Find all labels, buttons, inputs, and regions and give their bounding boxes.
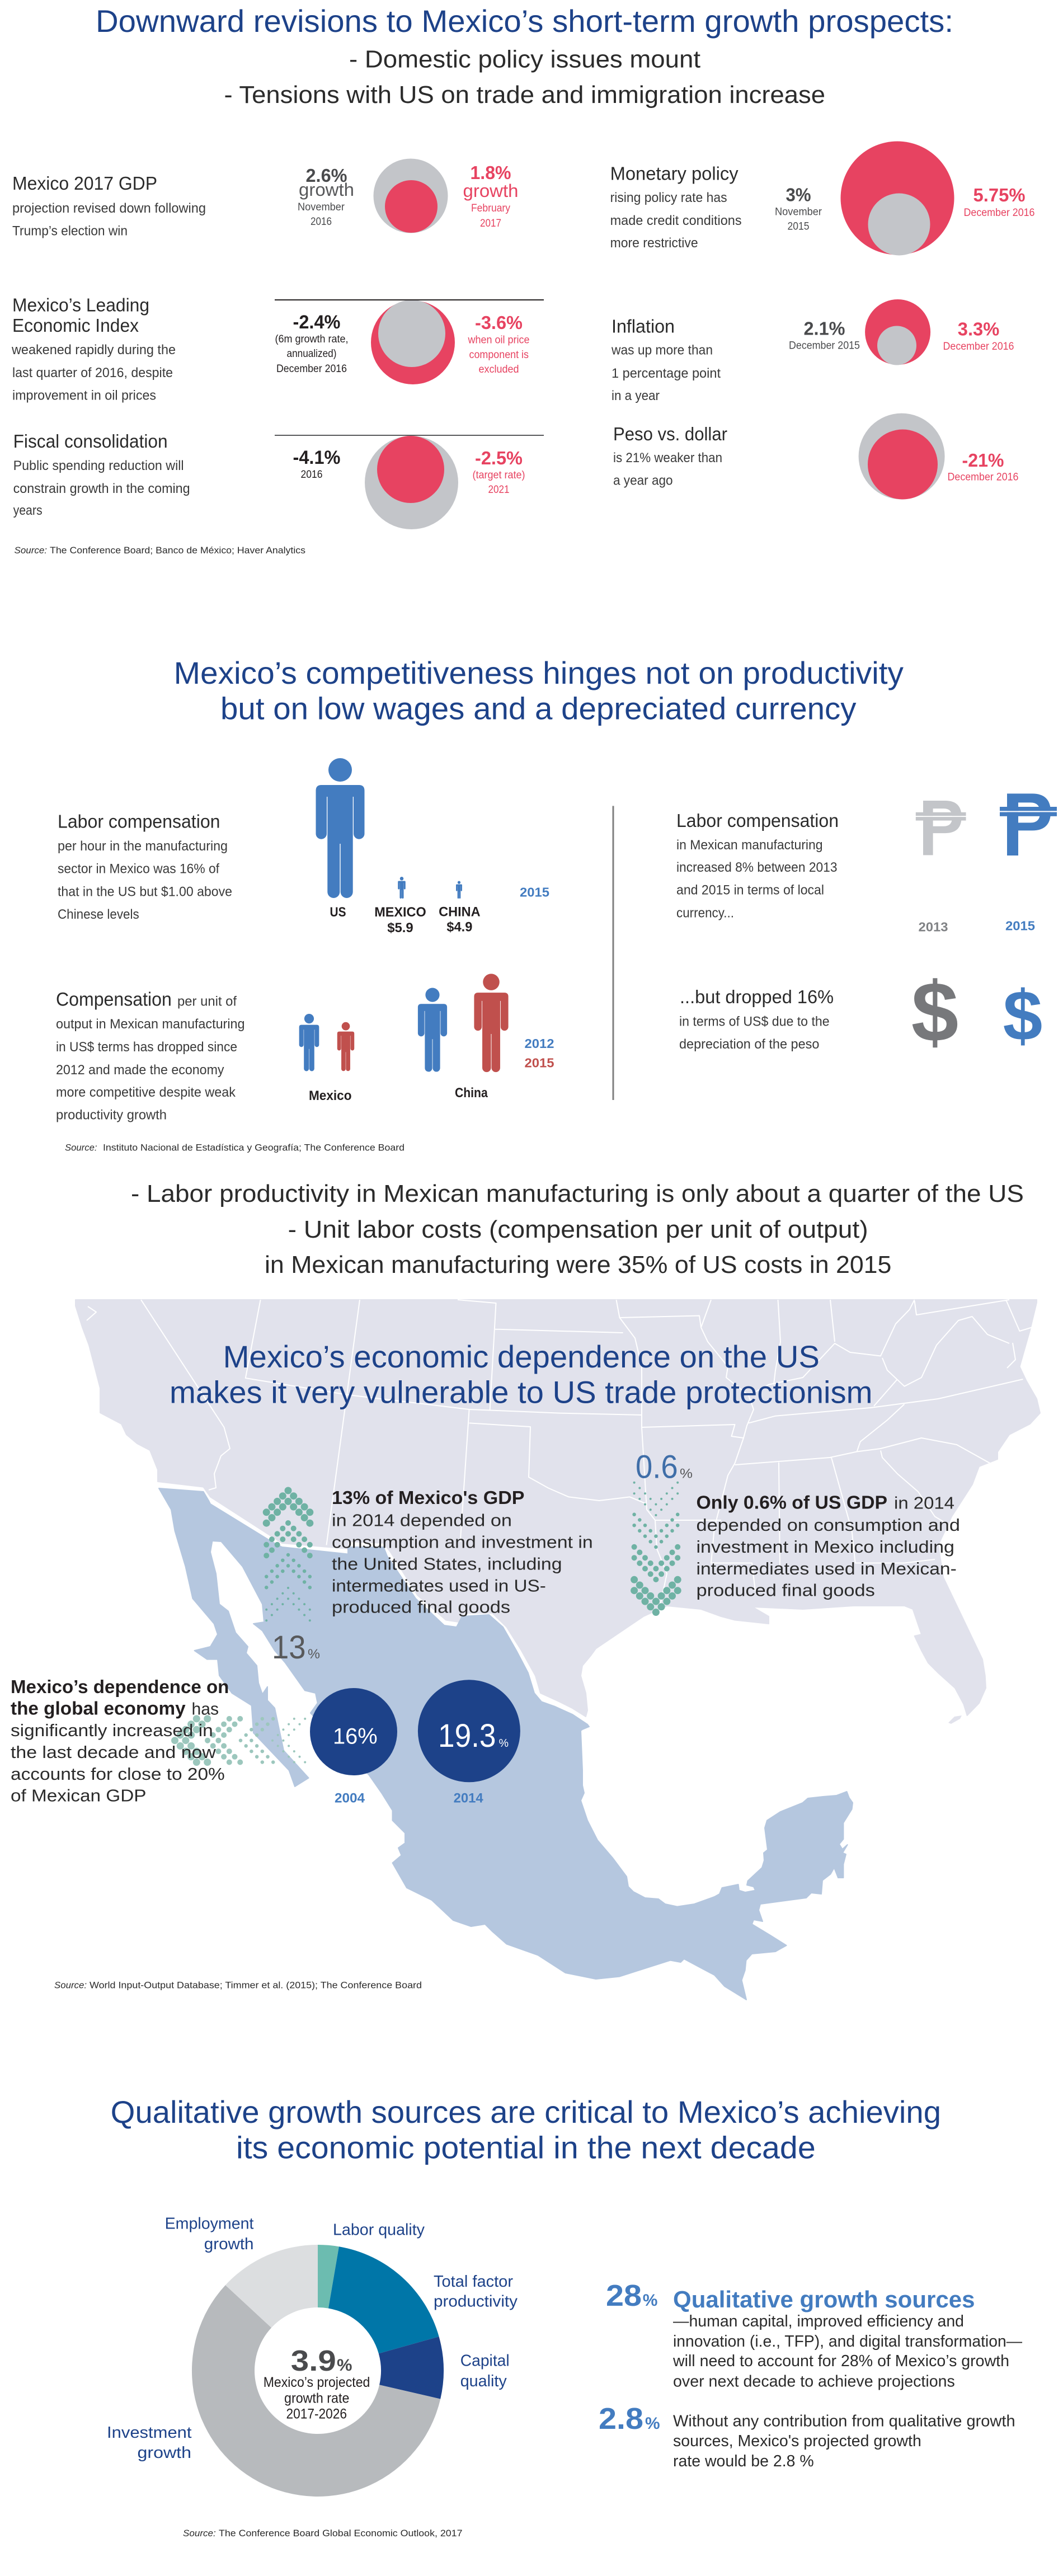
panel: trade dependence map	[11, 1300, 1040, 2000]
chart: compensation pictogram 2015: $4.9	[446, 920, 472, 935]
chart: fiscal consolidation circles: -4.1%	[293, 447, 340, 468]
chart: Leading Economic Index circles: December 2016	[276, 363, 347, 375]
text block: Leading Economic Index: improvement in oil prices	[12, 388, 156, 403]
legend label: employment growth: Employment	[165, 2215, 254, 2233]
legend label: capital quality: quality	[460, 2372, 507, 2390]
chart: GDP growth circles: 2017	[480, 218, 501, 229]
text block: Mexico 2017 GDP: Mexico 2017 GDP	[12, 173, 157, 194]
chart: unit compensation pictogram 2012 vs 2015	[299, 974, 554, 1103]
text block: Fiscal consolidation	[13, 431, 190, 518]
text block: 13% of Mexico's GDP: the United States, including	[332, 1554, 562, 1573]
chart: monetary policy circles: 5.75%	[973, 185, 1025, 205]
text block: Peso vs. dollar: is 21% weaker than	[613, 450, 722, 466]
text block: Inflation: in a year	[612, 388, 660, 403]
text block: labor productivity takeaways: - Labor productivity in Mexican manufacturing is only about a quarter of the US	[131, 1180, 1024, 1207]
text block: dependence on the global economy: has	[191, 1699, 219, 1718]
stat circle: 16% in 2004	[310, 1688, 397, 1806]
panel: competitiveness	[56, 655, 1057, 1153]
panel: short-term growth prospects	[11, 3, 1034, 556]
text block: dropped 16%	[679, 986, 834, 1052]
chart: GDP growth circles: growth	[299, 180, 354, 200]
chart: GDP growth circles	[298, 159, 518, 233]
source note: Source:	[54, 1981, 87, 1991]
text block: without qualitative contribution: sources, Mexico's projected growth	[673, 2432, 921, 2450]
text block: Inflation: Inflation	[612, 316, 675, 337]
text block: compensation per unit of output: 2012 and made the economy	[56, 1063, 224, 1078]
text block: Leading Economic Index: Mexico’s Leading	[12, 294, 149, 316]
text block: compensation per unit of output: Compensation	[56, 989, 172, 1010]
title: but on low wages and a depreciated currency	[220, 690, 856, 726]
center value	[264, 2345, 370, 2422]
legend label: employment growth	[165, 2215, 254, 2253]
source note: Instituto Nacional de Estadística y Geografía; The Conference Board	[103, 1143, 404, 1153]
text block: labor productivity takeaways	[131, 1180, 1024, 1278]
chart: compensation pictogram 2015: MEXICO	[374, 905, 426, 920]
source note: Source:	[15, 546, 47, 556]
text block: compensation per unit of output	[56, 989, 245, 1123]
segment: employment growth	[225, 2245, 318, 2328]
stat circle: 19.3% in 2014: 2014	[454, 1790, 483, 1806]
chart: GDP growth circles: growth	[463, 181, 518, 201]
text block: Leading Economic Index: last quarter of 2016, despite	[12, 365, 173, 380]
arrow: 13% flow upward	[266, 1491, 310, 1620]
text block: without qualitative contribution: Without any contribution from qualitative growth	[673, 2413, 1015, 2431]
stat: 28%: 28	[606, 2279, 642, 2312]
year labels: 2015	[1005, 919, 1035, 933]
text block: labor compensation in local currency	[676, 810, 839, 920]
text block: qualitative growth sources: will need to account for 28% of Mexico’s growth	[672, 2352, 1009, 2370]
chart: compensation pictogram 2015: $5.9	[387, 920, 413, 936]
text block: labor compensation per hour: that in the US but $1.00 above	[58, 884, 232, 900]
panel: qualitative growth sources	[107, 2094, 1022, 2539]
icon: US person	[316, 758, 365, 898]
text block: labor compensation per hour: Chinese levels	[58, 907, 139, 922]
text block: Leading Economic Index: Economic Index	[12, 315, 139, 336]
chart: fiscal consolidation circles	[275, 435, 544, 529]
text block: qualitative growth sources: —human capital, improved efficiency and	[673, 2312, 964, 2330]
chart: monetary policy circles: November	[775, 206, 822, 218]
stat: 28%: %	[643, 2291, 657, 2310]
segment: total factor productivity	[328, 2246, 439, 2353]
chart: Leading Economic Index circles: when oil price	[468, 335, 529, 346]
chart: monetary policy circles: 2015	[788, 220, 809, 233]
legend label: capital quality	[460, 2352, 510, 2390]
chart: GDP growth circles: 2016	[311, 216, 332, 228]
segment: investment growth	[192, 2285, 440, 2497]
text block: 13% of Mexico's GDP: consumption and investment in	[332, 1533, 593, 1552]
text block: 0.6% of US GDP: Only 0.6% of US GDP	[696, 1492, 887, 1513]
arrow: 0.6% flow downward	[634, 1483, 678, 1613]
chart: peso circles: December 2016	[948, 471, 1018, 483]
source note: Source:	[183, 2528, 216, 2539]
icon: dollar 2013: $	[911, 965, 958, 1060]
chart: compensation pictogram 2015: US	[330, 905, 346, 920]
chart: Leading Economic Index circles: -3.6%	[475, 312, 523, 333]
map: Mexico	[159, 1488, 853, 2000]
text block: qualitative growth sources	[672, 2286, 1022, 2391]
title: Mexico’s competitiveness hinges not on productivity	[174, 655, 904, 690]
text block: compensation per unit of output: output in Mexican manufacturing	[56, 1017, 245, 1032]
stat: 28%	[606, 2279, 657, 2312]
text block: labor compensation in local currency: and 2015 in terms of local	[676, 882, 824, 897]
icon: peso 2015	[1000, 793, 1057, 855]
text block: qualitative growth sources: Qualitative growth sources	[673, 2286, 975, 2312]
legend label: employment growth: growth	[204, 2235, 253, 2253]
text block: Monetary policy: Monetary policy	[610, 163, 739, 184]
stat: 2.8%: 2.8	[599, 2402, 643, 2436]
text block: Fiscal consolidation: constrain growth in the coming	[13, 481, 190, 496]
text block: Inflation: 1 percentage point	[612, 366, 721, 381]
stat: 0.6%: 0.6	[636, 1449, 678, 1486]
legend label: total factor productivity: productivity	[434, 2293, 518, 2311]
title: Mexico’s economic dependence on the US	[223, 1339, 820, 1374]
title	[174, 655, 904, 726]
chart: unit compensation pictogram 2012 vs 2015: China	[455, 1085, 488, 1101]
stat: 13%: %	[308, 1647, 320, 1662]
text block: Fiscal consolidation: Fiscal consolidation	[13, 431, 168, 452]
text block: dependence on the global economy	[11, 1676, 229, 1806]
legend label: investment growth: growth	[138, 2444, 191, 2462]
chart: Leading Economic Index circles: excluded	[479, 364, 519, 375]
chart: inflation circles: 2.1%	[803, 318, 845, 339]
chart: peso circles: -21%	[962, 450, 1004, 471]
text block: Peso vs. dollar: Peso vs. dollar	[613, 424, 727, 444]
stat circle: 16% in 2004: 2004	[335, 1790, 365, 1806]
text block: Inflation	[611, 316, 721, 403]
text block: 0.6% of US GDP: investment in Mexico including	[696, 1537, 954, 1557]
stat: 13%: 13	[272, 1629, 306, 1666]
text block: Leading Economic Index	[11, 294, 176, 403]
chart: fiscal consolidation circles: 2021	[488, 484, 509, 496]
chart: monetary policy circles	[775, 141, 1035, 255]
stat circle: 19.3% in 2014	[418, 1680, 520, 1806]
chart: monetary policy circles: December 2016	[963, 207, 1035, 219]
chart: GDP growth circles: November	[298, 201, 345, 213]
text block: Monetary policy: more restrictive	[610, 236, 698, 251]
text block: Fiscal consolidation: years	[13, 503, 43, 518]
year labels	[919, 919, 1035, 934]
text block: labor compensation per hour: per hour in the manufacturing	[58, 839, 228, 854]
chart: compensation pictogram 2015	[316, 758, 549, 936]
stat circle: 19.3% in 2014: %	[499, 1737, 509, 1750]
text block: compensation per unit of output: productivity growth	[56, 1108, 167, 1123]
text block: Mexico 2017 GDP: projection revised down following	[12, 201, 206, 216]
text block: Monetary policy: rising policy rate has	[610, 190, 727, 205]
chart: inflation circles	[789, 299, 1014, 365]
chart: fiscal consolidation circles: (target rate)	[472, 469, 525, 481]
text block: Mexico 2017 GDP: Trump’s election win	[12, 224, 128, 238]
text block: dependence on the global economy: of Mexican GDP	[11, 1786, 147, 1806]
chart: unit compensation pictogram 2012 vs 2015: Mexico	[309, 1088, 351, 1103]
segment: capital quality	[379, 2337, 444, 2399]
text block: without qualitative contribution	[673, 2413, 1015, 2470]
chart: compensation pictogram 2015: 2015	[520, 885, 549, 900]
legend label: total factor productivity: Total factor	[434, 2273, 513, 2291]
text block: compensation per unit of output: in US$ terms has dropped since	[56, 1040, 237, 1055]
text block: Mexico 2017 GDP	[12, 173, 206, 238]
divider	[612, 806, 614, 1100]
text block: dropped 16%: depreciation of the peso	[679, 1037, 819, 1052]
text block: dependence on the global economy: significantly increased in	[11, 1721, 213, 1740]
stat: 2.8%	[599, 2402, 660, 2436]
text block: dropped 16%: ...but dropped 16%	[680, 986, 834, 1007]
chart: inflation circles: December 2016	[943, 341, 1014, 352]
center value: Mexico’s projected	[264, 2375, 370, 2390]
map: United States	[76, 1300, 1040, 1724]
chart: unit compensation pictogram 2012 vs 2015: 2012	[525, 1036, 554, 1051]
text block: labor compensation in local currency: currency...	[676, 905, 734, 920]
text block: 13% of Mexico's GDP: in 2014 depended on	[332, 1511, 512, 1530]
source note: The Conference Board Global Economic Outlook, 2017	[219, 2528, 462, 2539]
center value: 3.9	[291, 2345, 336, 2377]
subtitle line 1: - Domestic policy issues mount	[349, 46, 700, 73]
chart: fiscal consolidation circles: 2016	[301, 469, 322, 481]
text block: without qualitative contribution: rate would be 2.8 %	[673, 2452, 814, 2470]
stat: 2.8%: %	[645, 2414, 660, 2433]
text block: dropped 16%: in terms of US$ due to the	[679, 1014, 830, 1030]
stat circle: 19.3% in 2014: 19.3	[438, 1718, 496, 1754]
chart: GDP growth circles: 1.8%	[470, 162, 511, 183]
title: its economic potential in the next decade	[236, 2130, 816, 2165]
text block: dependence on the global economy: accounts for close to 20%	[11, 1764, 225, 1784]
text block: compensation per unit of output: more competitive despite weak	[56, 1085, 236, 1100]
legend label: labor quality: Labor quality	[333, 2221, 425, 2239]
text block: Leading Economic Index: weakened rapidly during the	[11, 342, 176, 358]
text block: Monetary policy	[610, 163, 742, 251]
title: Downward revisions to Mexico’s short-term growth prospects:	[96, 3, 953, 39]
chart: unit compensation pictogram 2012 vs 2015: 2015	[525, 1056, 554, 1070]
source note: World Input-Output Database; Timmer et al. (2015); The Conference Board	[90, 1981, 422, 1991]
text block: 0.6% of US GDP	[696, 1492, 960, 1600]
legend label: investment growth	[107, 2424, 191, 2462]
text block: Inflation: was up more than	[611, 342, 713, 358]
text block: 0.6% of US GDP: in 2014	[894, 1493, 954, 1513]
chart: Leading Economic Index circles: -2.4%	[293, 312, 340, 333]
legend label: total factor productivity	[434, 2273, 518, 2311]
text block: labor compensation per hour: sector in Mexico was 16% of	[58, 862, 219, 876]
text block: Monetary policy: made credit conditions	[610, 213, 742, 228]
chart: fiscal consolidation circles: -2.5%	[475, 448, 523, 468]
text block: 0.6% of US GDP: intermediates used in Mexican-	[696, 1559, 957, 1578]
text block: labor compensation per hour: Labor compensation	[58, 811, 220, 832]
center value: %	[337, 2356, 352, 2375]
title: Qualitative growth sources are critical to Mexico’s achieving	[111, 2094, 941, 2130]
icon: China person	[456, 881, 462, 899]
center value: growth rate	[284, 2390, 349, 2406]
chart: peso circles	[859, 413, 1018, 500]
legend label: capital quality: Capital	[460, 2352, 510, 2370]
icon: peso 2013	[916, 801, 966, 855]
text block: 13% of Mexico's GDP: 13% of Mexico's GDP	[332, 1487, 525, 1508]
text block: dependence on the global economy: the last decade and now	[11, 1742, 216, 1762]
chart: GDP growth circles: February	[471, 203, 510, 214]
stat: 0.6%: %	[680, 1466, 693, 1482]
text block: labor compensation in local currency: Labor compensation	[676, 810, 839, 831]
text block: 13% of Mexico's GDP	[332, 1487, 593, 1617]
text block: labor productivity takeaways: - Unit labor costs (compensation per unit of output)	[288, 1216, 868, 1243]
text block: labor productivity takeaways: in Mexican manufacturing were 35% of US costs in 2015	[265, 1251, 891, 1278]
chart: inflation circles: 3.3%	[958, 319, 999, 339]
chart: compensation pictogram 2015: CHINA	[439, 905, 481, 920]
text block: compensation per unit of output: per unit of	[177, 994, 237, 1009]
title	[111, 2094, 941, 2165]
legend label: investment growth: Investment	[107, 2424, 191, 2442]
source note: The Conference Board; Banco de México; Haver Analytics	[50, 546, 305, 556]
chart: monetary policy circles: 3%	[786, 185, 811, 205]
text block: labor compensation per hour	[58, 811, 232, 922]
text block: Fiscal consolidation: Public spending reduction will	[13, 458, 184, 473]
chart: Leading Economic Index circles: (6m growth rate,	[275, 333, 348, 345]
donut chart	[192, 2245, 444, 2497]
text block: qualitative growth sources: innovation (i.e., TFP), and digital transformation—	[673, 2333, 1022, 2351]
chart: Leading Economic Index circles: component is	[469, 349, 529, 361]
center value: 2017-2026	[286, 2406, 347, 2422]
chart: Leading Economic Index circles	[275, 299, 544, 384]
text block: dependence on the global economy: Mexico’s dependence on	[11, 1676, 229, 1697]
chart: inflation circles: December 2015	[789, 340, 860, 351]
source note: Source:	[65, 1143, 97, 1153]
segment: labor quality	[318, 2245, 339, 2309]
text block: 13% of Mexico's GDP: intermediates used in US-	[332, 1576, 546, 1595]
chart: GDP growth circles: 2.6%	[305, 165, 347, 186]
title: makes it very vulnerable to US trade protectionism	[170, 1375, 873, 1410]
text block: Peso vs. dollar	[613, 424, 727, 488]
text block: 13% of Mexico's GDP: produced final goods	[332, 1597, 510, 1617]
icon: dollar 2015: $	[1003, 976, 1042, 1055]
text block: qualitative growth sources: over next decade to achieve projections	[673, 2373, 955, 2391]
year labels: 2013	[919, 920, 948, 934]
text block: labor compensation in local currency: increased 8% between 2013	[676, 860, 837, 875]
icon: Mexico person	[398, 877, 406, 899]
stat circle: 16% in 2004: 16%	[333, 1724, 378, 1749]
chart: Leading Economic Index circles: annualized)	[286, 348, 337, 360]
text block: 0.6% of US GDP: depended on consumption and	[696, 1515, 960, 1535]
text block: 0.6% of US GDP: produced final goods	[696, 1581, 875, 1600]
subtitle line 2: - Tensions with US on trade and immigration increase	[224, 81, 825, 109]
text block: labor compensation in local currency: in Mexican manufacturing	[676, 838, 822, 853]
arrow: global economy flow leftward	[175, 1719, 305, 1762]
text block: Peso vs. dollar: a year ago	[613, 473, 673, 488]
title	[170, 1339, 873, 1410]
text block: dependence on the global economy: the global economy	[11, 1698, 186, 1718]
